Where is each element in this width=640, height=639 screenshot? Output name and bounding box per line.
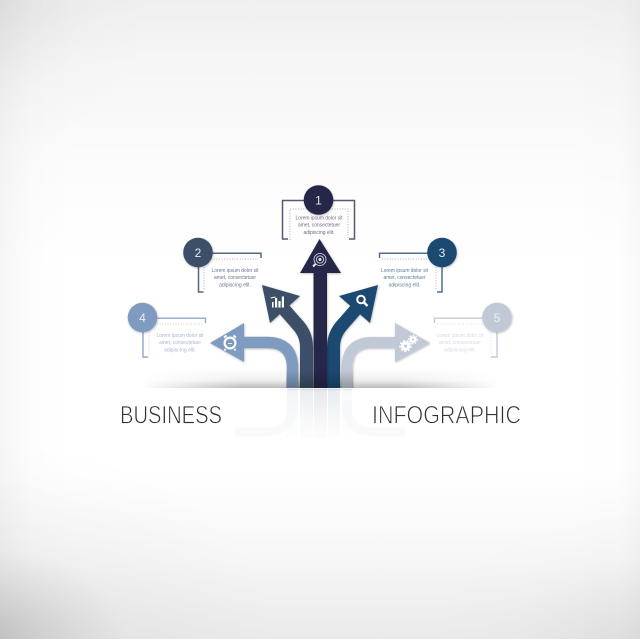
dotted frame 2	[204, 259, 258, 290]
icon: alarm clock	[224, 336, 236, 350]
text block 1: Lorem ipsum dolor sit	[296, 216, 343, 222]
text block 4: Lorem ipsum dolor sit	[156, 333, 204, 339]
text block 3: Lorem ipsum dolor sit	[381, 268, 428, 274]
floor highlight edge	[140, 388, 500, 389]
text block 3: adipiscing elit.	[388, 282, 421, 288]
text block 5: amet, consectetuer	[439, 340, 481, 346]
bracket 1	[282, 200, 354, 239]
circle 5	[482, 303, 512, 332]
number 3: 3	[439, 246, 446, 260]
dotted frame 5	[437, 324, 491, 355]
text block 1: adipiscing elit.	[304, 230, 335, 236]
text block 3: amet, consectetuer	[384, 275, 426, 281]
circle 2	[183, 238, 213, 267]
floor shadow	[153, 374, 487, 388]
arrow 1: dark navy, pointing up	[300, 239, 341, 388]
number 1: 1	[315, 194, 322, 208]
circle 3	[427, 238, 457, 267]
dotted frame 1	[290, 209, 348, 240]
panel 2	[183, 238, 261, 292]
text block 4	[156, 333, 204, 354]
panel 5	[434, 303, 512, 357]
circle 4	[128, 303, 157, 332]
arrow 3: blue, pointing up-right	[334, 285, 378, 388]
number 4: 4	[139, 311, 146, 325]
icon: gears	[400, 335, 417, 351]
panel 1	[282, 185, 354, 240]
text block 5	[436, 333, 484, 354]
arrow 4: light blue, pointing left	[210, 323, 292, 388]
icon: magnifying glass	[357, 296, 368, 306]
arrow 5: grey, pointing right	[347, 323, 430, 388]
text block 1: amet, consectetuer	[298, 222, 340, 228]
text block 2: Lorem ipsum dolor sit	[212, 268, 259, 274]
bracket 3	[380, 253, 442, 292]
reflection of arrow shafts	[235, 388, 405, 448]
text block 4: adipiscing elit.	[164, 348, 196, 354]
darkening at the base of the arrows	[286, 370, 353, 388]
text block 5: adipiscing elit.	[444, 348, 476, 354]
text block 2: adipiscing elit.	[219, 282, 251, 288]
text block 3	[381, 268, 428, 288]
arrow 2: slate, pointing up-left	[262, 285, 306, 388]
text block 4: amet, consectetuer	[159, 340, 201, 346]
panel 4	[128, 303, 206, 357]
number 5: 5	[494, 311, 501, 325]
circle 1	[304, 185, 333, 215]
dotted frame 3	[382, 259, 436, 290]
title: BUSINESS: BUSINESS	[120, 402, 222, 430]
bracket 2	[198, 253, 261, 292]
text block 5: Lorem ipsum dolor sit	[436, 333, 484, 339]
title: INFOGRAPHIC: INFOGRAPHIC	[372, 402, 521, 430]
text block 2: amet, consectetuer	[214, 275, 256, 281]
panel 3	[380, 238, 457, 292]
text block 2	[212, 268, 259, 288]
bracket 4	[143, 318, 206, 357]
dotted frame 4	[149, 324, 204, 355]
number 2: 2	[195, 246, 202, 260]
icon: target	[313, 254, 326, 266]
bracket 5	[434, 318, 497, 357]
icon: bar chart	[271, 296, 284, 308]
text block 1	[296, 216, 343, 236]
